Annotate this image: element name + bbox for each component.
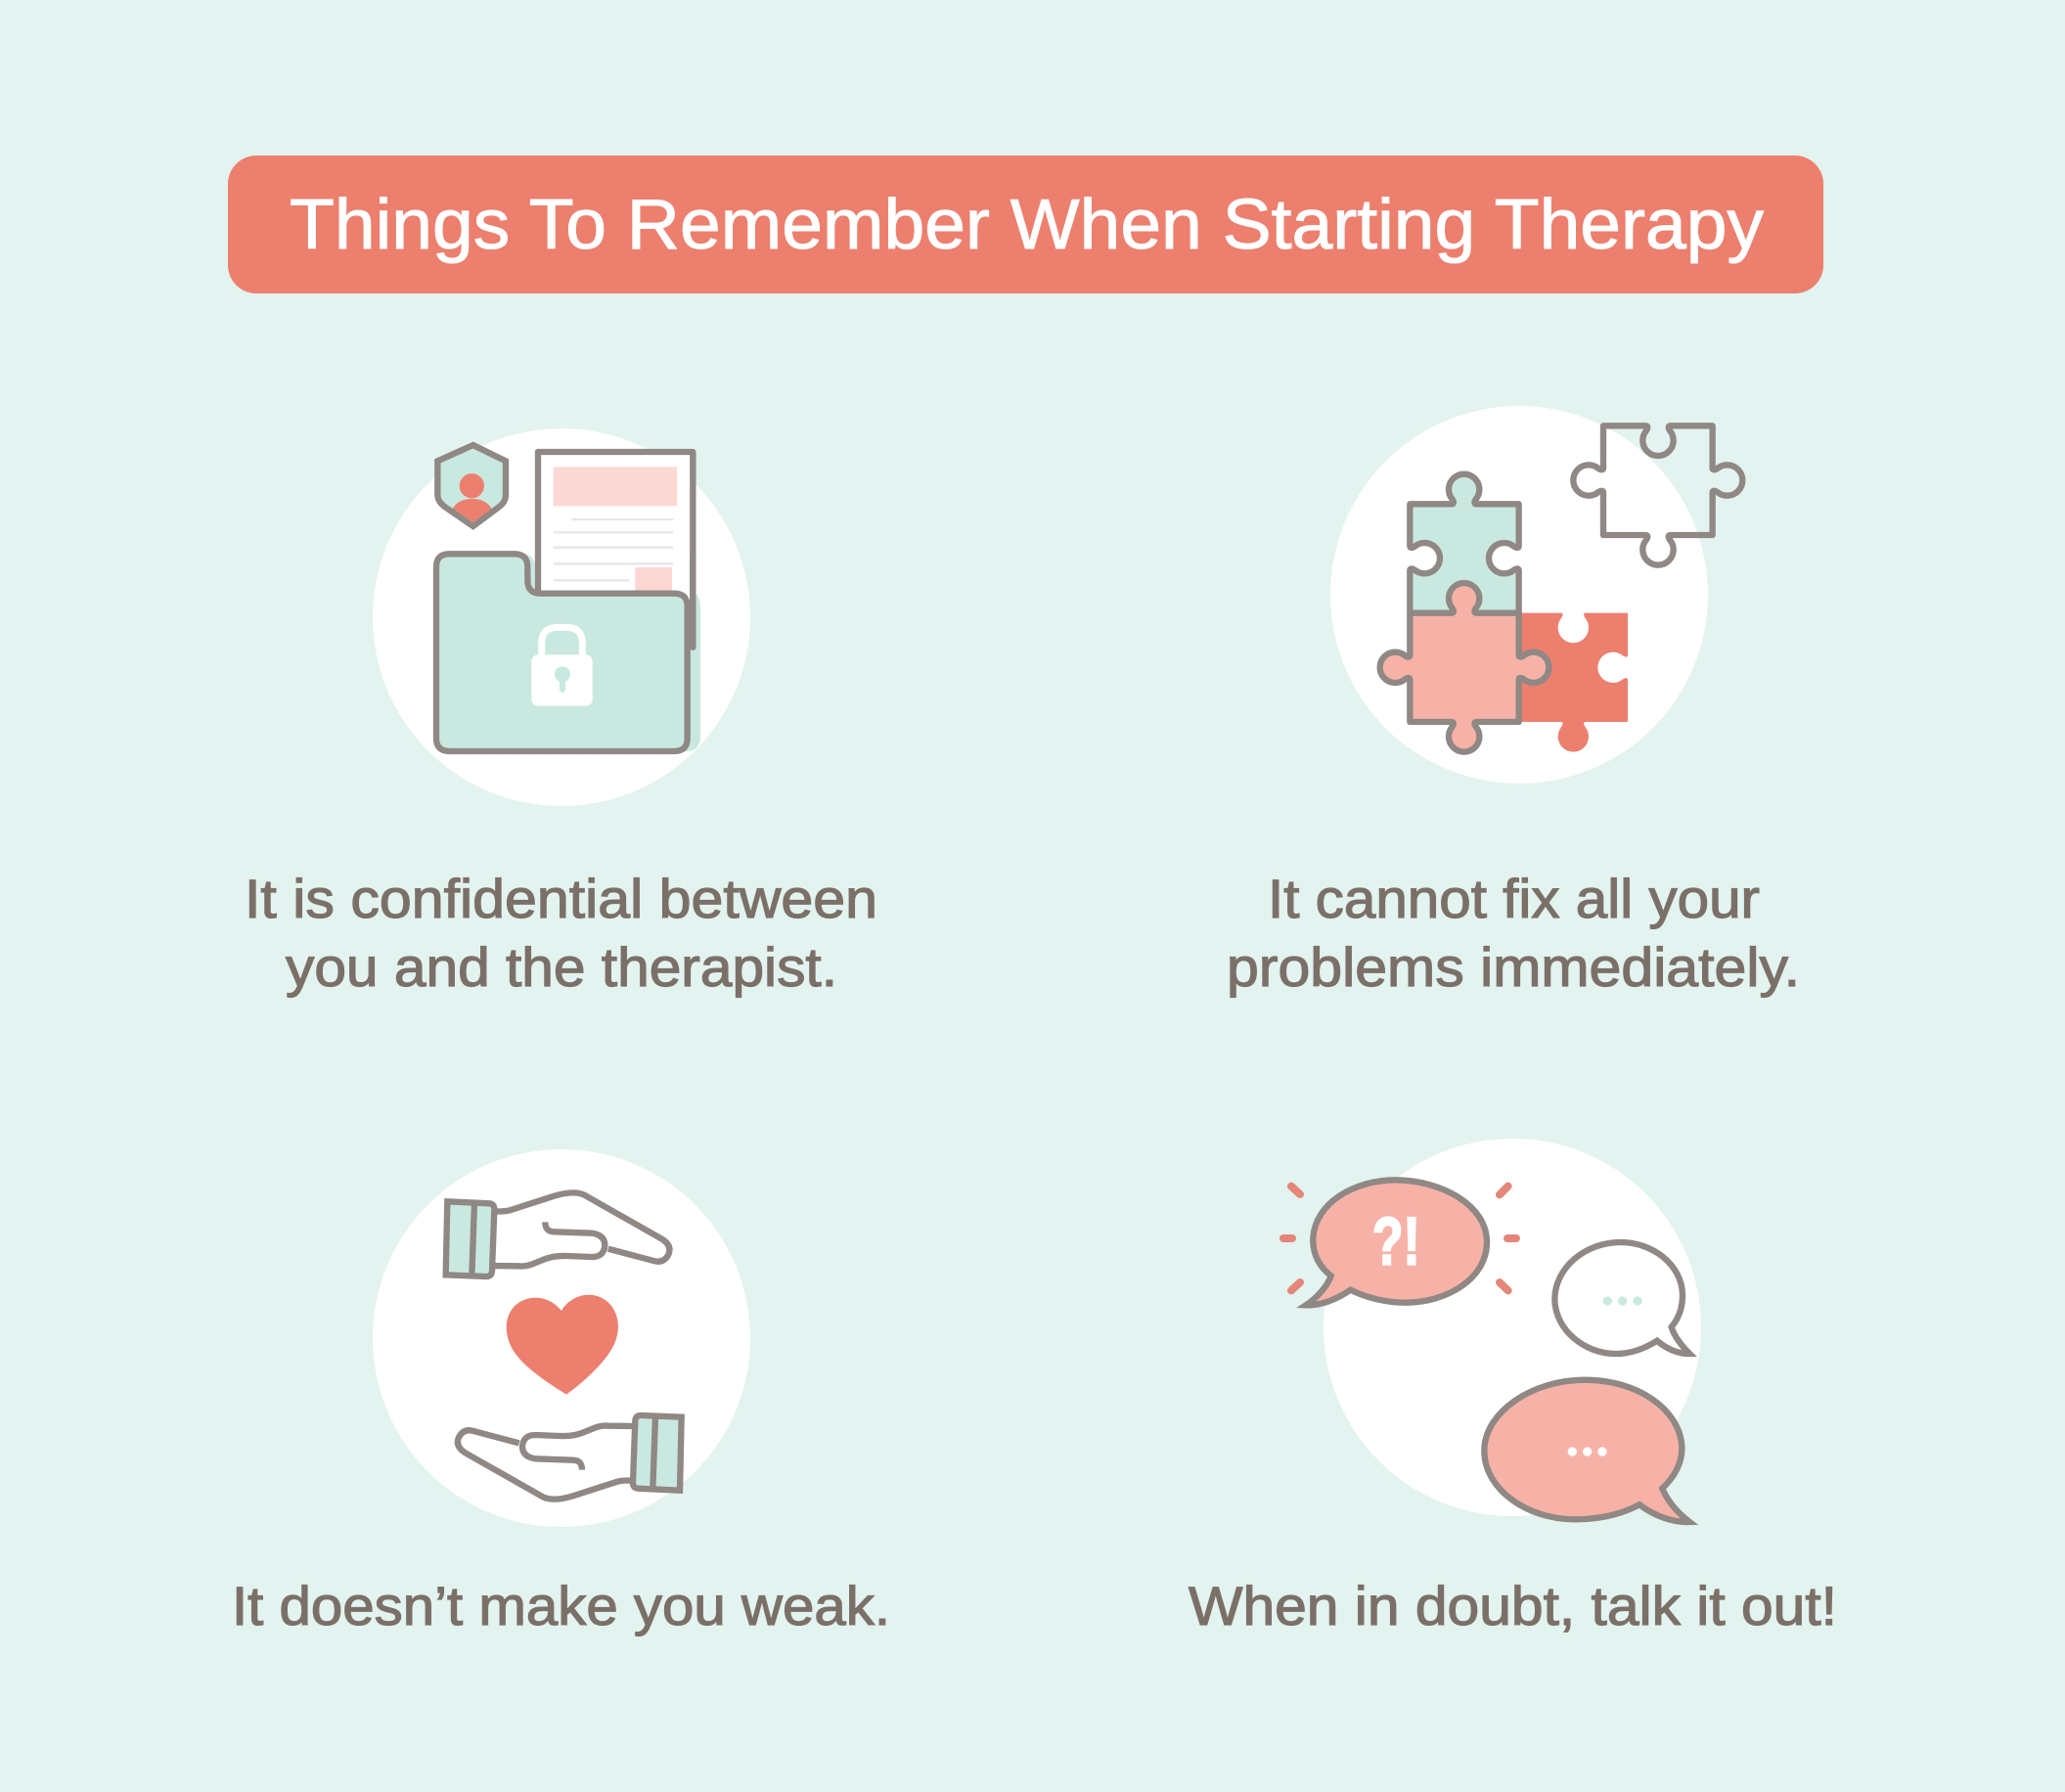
title: Things To Remember When Starting Therapy [290,186,1764,264]
caption: confidential: you and the therapist. [286,936,837,998]
panel: talk it out [1189,1139,1837,1636]
caption: confidential [245,868,877,998]
caption: puzzle: problems immediately. [1227,936,1800,998]
title banner [228,156,1823,293]
icon: speech bubbles [1283,1139,1701,1522]
caption: puzzle: It cannot fix all your [1268,868,1760,929]
panel: puzzle [1227,406,1800,998]
caption: confidential: It is confidential between [245,868,877,929]
panel: not weak [232,1149,890,1636]
panel: confidential [245,428,877,998]
caption: not weak: It doesn’t make you weak. [232,1575,890,1636]
caption: talk it out: When in doubt, talk it out! [1189,1575,1837,1636]
caption: puzzle [1227,868,1800,998]
icon: folder with lock, document and shield [373,428,750,806]
icon: hands holding heart [373,1149,750,1527]
icon: puzzle pieces [1330,406,1742,784]
icon: speech bubbles: ?! [1372,1204,1420,1278]
